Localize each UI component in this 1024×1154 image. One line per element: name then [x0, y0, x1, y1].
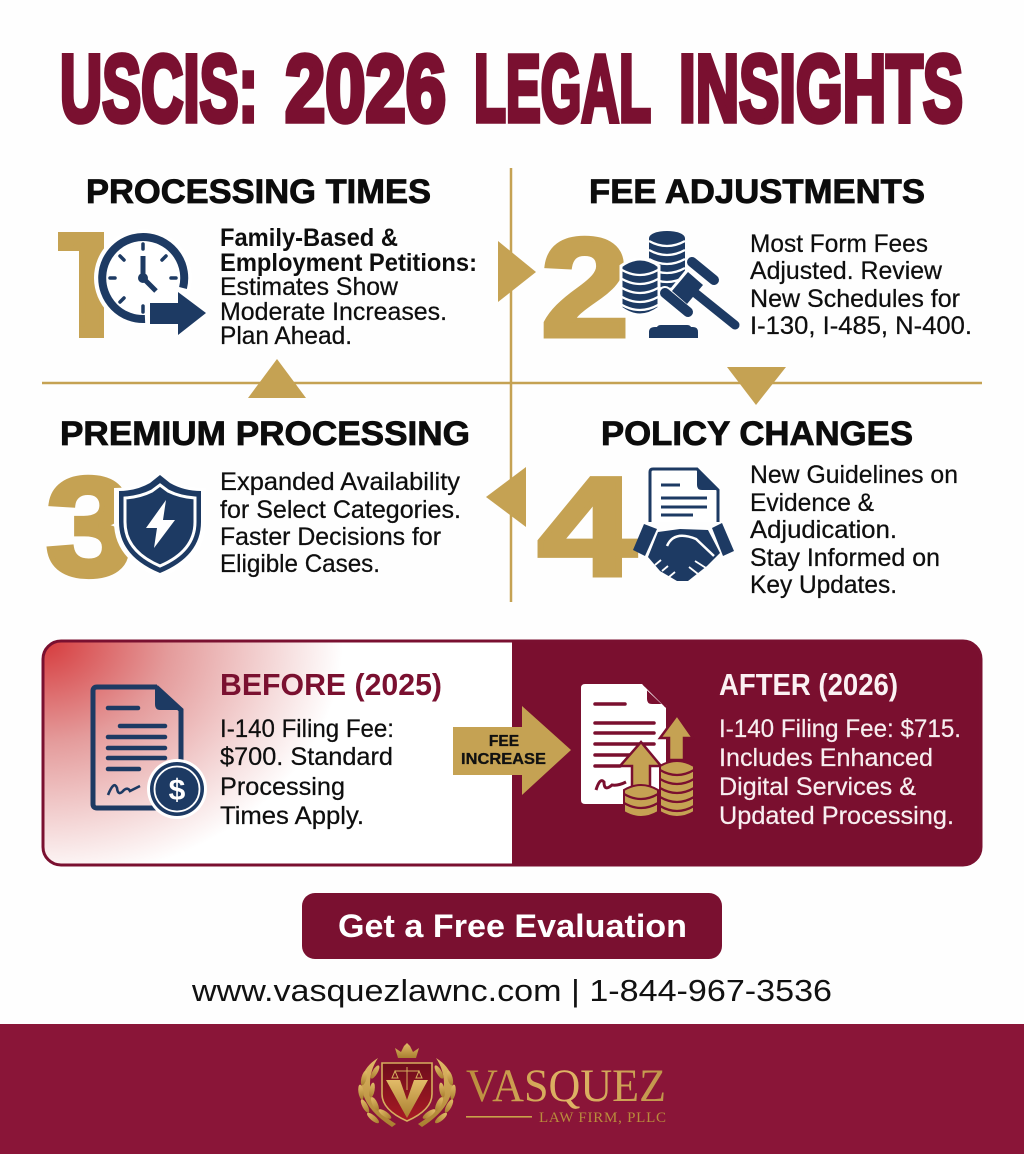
panel: fee adjustments: [541, 173, 972, 366]
text: processing times: Estimates Show: [220, 273, 399, 301]
text: premium processing: Faster Decisions for: [220, 523, 441, 551]
logo: crest: [357, 1043, 457, 1127]
panel: before and after comparison: [43, 641, 981, 865]
text: processing times: Moderate Increases.: [220, 298, 447, 326]
text: after 2026: AFTER (2026): [719, 667, 898, 702]
text: processing times: Employment Petitions:: [220, 249, 477, 277]
icon: coins and gavel: [621, 231, 735, 338]
arrow: left: [486, 467, 526, 527]
icon: document with dollar coin: [93, 686, 207, 819]
icon: document with dollar coin: $: [169, 774, 186, 807]
text: fee adjustments: Adjusted. Review: [750, 257, 943, 285]
text: premium processing: for Select Categories.: [220, 496, 461, 524]
divider lines: [42, 168, 982, 602]
number 2: 2: [541, 209, 629, 366]
arrow: fee increase: FEE: [489, 733, 519, 750]
text: policy changes: Adjudication.: [750, 516, 897, 544]
number 1: [58, 232, 104, 338]
heading: premium processing: PREMIUM PROCESSING: [60, 415, 470, 453]
text: before 2025: I-140 Filing Fee:: [220, 715, 394, 743]
number 1: 1: [50, 211, 128, 368]
heading: policy changes: POLICY CHANGES: [601, 415, 913, 453]
text: fee adjustments: Most Form Fees: [750, 230, 928, 258]
laurel wreath: [357, 1058, 457, 1127]
text: processing times: Plan Ahead.: [220, 322, 352, 350]
arrow: up: [248, 359, 306, 398]
icon: shield with lightning bolt: [114, 470, 206, 578]
text: after 2026: Digital Services &: [719, 773, 916, 801]
title: USCIS:: [60, 36, 258, 142]
logo: wordmark: VASQUEZ: [466, 1060, 666, 1112]
heading: fee adjustments: FEE ADJUSTMENTS: [589, 173, 925, 211]
number 4: 4: [538, 448, 636, 605]
logo: wordmark: LAW FIRM, PLLC: [539, 1110, 666, 1126]
crown: [395, 1043, 419, 1058]
panel: policy changes: [538, 415, 958, 605]
scales: [392, 1067, 422, 1090]
panel: premium processing: [46, 415, 470, 605]
number 3: 3: [46, 448, 132, 605]
arrow: fee increase: INCREASE: [461, 751, 546, 768]
text: fee adjustments: I-130, I-485, N-400.: [750, 312, 972, 340]
text: after 2026: [719, 667, 961, 830]
text: policy changes: New Guidelines on: [750, 461, 958, 489]
v emblem: [386, 1080, 428, 1118]
text: after 2026: Updated Processing.: [719, 802, 954, 830]
text: before 2025: Times Apply.: [220, 802, 364, 830]
contact line: www.vasquezlawnc.com | 1-844-967-3536: [191, 973, 832, 1008]
text: premium processing: Expanded Availability: [220, 468, 460, 496]
text: before 2025: Processing: [220, 773, 345, 801]
text: processing times: Family-Based &: [220, 224, 398, 252]
icon: document with rising coins: [581, 684, 694, 817]
text: processing times: [220, 224, 477, 350]
text: policy changes: Evidence &: [750, 489, 874, 517]
text: after 2026: Includes Enhanced: [719, 744, 933, 772]
title: [60, 36, 963, 142]
text: before 2025: $700. Standard: [220, 743, 393, 771]
panel: processing times: [58, 178, 475, 344]
text: policy changes: Stay Informed on: [750, 544, 940, 572]
icon: clock with arrow: [94, 229, 210, 339]
text: before 2025: BEFORE (2025): [220, 667, 442, 702]
arrow: fee increase: [453, 706, 571, 795]
heading: processing times: PROCESSING TIMES: [86, 173, 431, 211]
text: after 2026: I-140 Filing Fee: $715.: [719, 715, 961, 743]
text: policy changes: [750, 461, 958, 599]
text: fee adjustments: New Schedules for: [750, 285, 960, 313]
shield: [382, 1063, 432, 1121]
text: fee adjustments: [750, 230, 972, 340]
button: get a free evaluation: Get a Free Evaluation: [338, 908, 687, 944]
arrow: right: [498, 241, 536, 302]
footer band: [0, 1024, 1024, 1154]
icon: document and handshake: [633, 469, 734, 581]
arrow: down: [727, 367, 786, 405]
text: before 2025: [220, 667, 442, 830]
text: premium processing: Eligible Cases.: [220, 550, 380, 578]
text: policy changes: Key Updates.: [750, 571, 897, 599]
text: premium processing: [220, 468, 461, 578]
title: 2026: [285, 36, 446, 142]
button: get a free evaluation: [302, 893, 722, 959]
title: LEGAL: [474, 36, 651, 142]
